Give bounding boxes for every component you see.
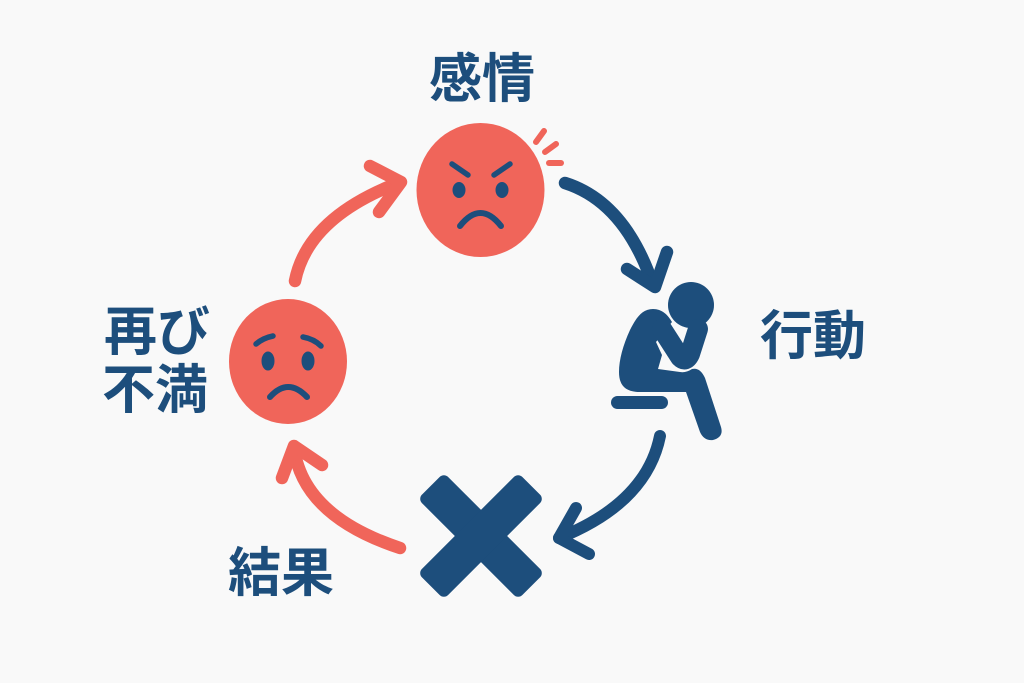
heading: 感情: 感情 [429,50,535,109]
arrow: emotion to action [565,183,667,287]
arrow: dissatisfaction to emotion [295,166,401,281]
icon: sad face [229,299,347,424]
heading: 再び不満: 不満 [102,361,208,420]
heading: 結果: 結果 [228,544,334,603]
heading: 再び不満: 再び [104,303,210,362]
icon: angry face [416,123,544,257]
heading: 再び不満 [102,303,210,420]
icon: sitting person [611,282,722,440]
arrow: result to dissatisfaction [282,446,400,548]
icon: anger spark lines [536,131,561,163]
heading: 行動: 行動 [760,307,866,366]
icon: cross mark [418,473,544,599]
arrow: action to result [559,436,660,554]
